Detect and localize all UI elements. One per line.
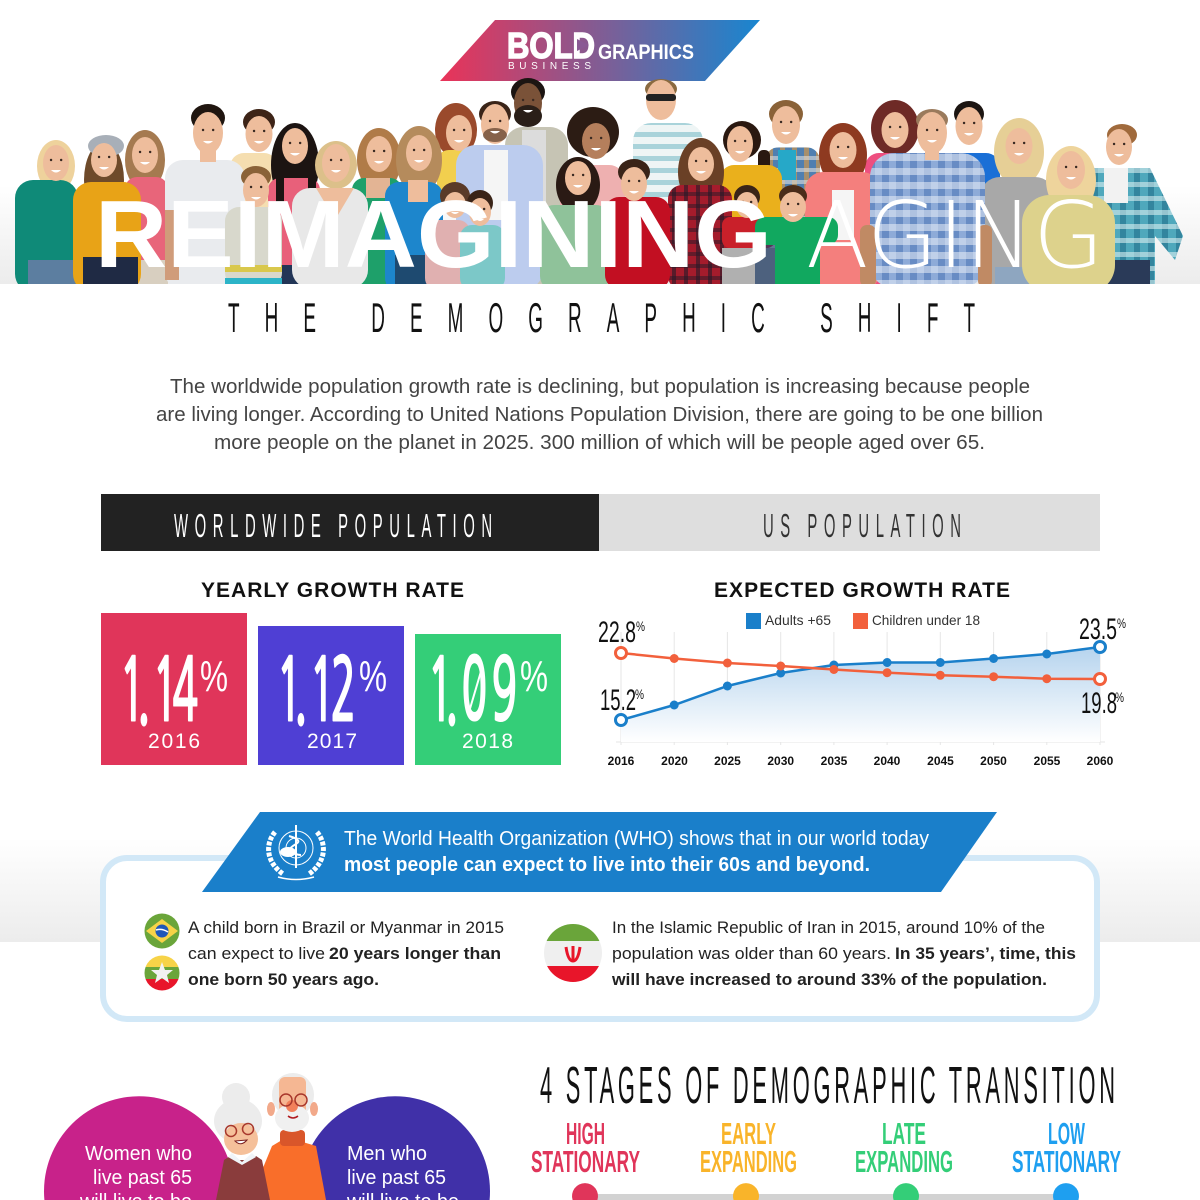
grandfather	[258, 1073, 326, 1200]
stat card 2017	[258, 626, 404, 765]
heading: expected growth rate: EXPECTED GROWTH RATE	[714, 579, 1010, 602]
WHO banner text: The World Health Organization (WHO) shows that in our world today	[344, 828, 929, 850]
x axis years: 2060	[1087, 754, 1114, 768]
value callouts: %	[635, 686, 644, 702]
area under adults series	[621, 647, 1100, 742]
chart legend: Children under 18	[872, 612, 980, 628]
tab: US population	[599, 494, 1100, 551]
heading: yearly growth rate: YEARLY GROWTH RATE	[201, 579, 464, 602]
stat card 2018: 2018	[462, 730, 513, 753]
value callouts	[598, 613, 1126, 720]
hero photo of diverse people	[0, 78, 1200, 293]
value callouts: %	[1117, 615, 1126, 631]
heading: 4 stages of demographic transition: 4 STAGES OF DEMOGRAPHIC TRANSITION	[540, 1057, 1115, 1115]
chart legend	[746, 612, 980, 629]
value callouts: %	[636, 618, 645, 634]
stat card 2016: %	[200, 652, 228, 701]
x axis years: 2035	[821, 754, 848, 768]
intro paragraph: are living longer. According to United Nations Population Division, there are going to be one billion	[156, 404, 1043, 426]
stage: low stationary	[1012, 1116, 1121, 1179]
x axis years: 2025	[714, 754, 741, 768]
x axis years: 2016	[608, 754, 635, 768]
stat card 2017: %	[359, 652, 387, 701]
stat card 2016	[101, 613, 247, 765]
intro paragraph	[156, 376, 1043, 454]
grandmother	[214, 1083, 270, 1200]
person group middle row	[125, 101, 1183, 292]
x axis years: 2055	[1034, 754, 1061, 768]
stage: high stationary	[531, 1116, 640, 1179]
person group front row	[15, 104, 1115, 293]
value callouts: 19.8	[1081, 687, 1117, 720]
stage: late expanding: LATE	[882, 1116, 926, 1151]
text: Iran: will have increased to around 33% of the population.	[611, 970, 1047, 989]
intro paragraph: more people on the planet in 2025. 300 million of which will be people aged over 65.	[214, 432, 985, 454]
icon: Iran flag	[544, 924, 602, 983]
text: Iran: population was older than 60 years.	[612, 944, 891, 963]
icon: elderly couple	[214, 1073, 326, 1200]
text: Brazil and Myanmar: 20 years longer than	[329, 944, 501, 963]
text: Iran: In the Islamic Republic of Iran in 2015, around 10% of the	[612, 918, 1045, 937]
tab: US population: US POPULATION	[763, 509, 961, 545]
title light word: AGING	[806, 182, 1104, 289]
stage: low stationary: LOW	[1048, 1116, 1085, 1151]
intro paragraph: The worldwide population growth rate is declining, but population is increasing because people	[170, 376, 1030, 398]
women life expectancy circle: live past 65	[93, 1167, 192, 1189]
value callouts: 22.8	[598, 616, 636, 649]
stage: high stationary: STATIONARY	[531, 1144, 640, 1179]
logo graphics label: GRAPHICS	[598, 41, 694, 64]
stage timeline	[572, 1183, 1079, 1200]
x axis years: 2040	[874, 754, 901, 768]
x axis years: 2020	[661, 754, 688, 768]
text: Iran	[611, 918, 1076, 989]
women life expectancy circle: Women who	[85, 1143, 192, 1165]
value callouts: 15.2	[600, 684, 636, 717]
chart legend: Adults +65	[765, 612, 831, 628]
men life expectancy circle: live past 65	[347, 1167, 446, 1189]
stat card 2017: 1.12	[276, 648, 357, 735]
series: adults +65	[616, 642, 1106, 726]
value callouts: %	[1115, 689, 1124, 705]
logo banner	[440, 20, 760, 81]
x axis years: 2030	[767, 754, 794, 768]
WHO info panel	[103, 812, 1097, 1019]
icon: WHO emblem	[269, 825, 323, 880]
x axis years: 2045	[927, 754, 954, 768]
text: Iran: In 35 years’, time, this	[895, 944, 1076, 963]
title bold word: REIMAGINING	[95, 181, 772, 288]
icon: Myanmar flag	[144, 955, 180, 991]
text: Brazil and Myanmar: A child born in Brazil or Myanmar in 2015	[188, 918, 504, 937]
tab: worldwide population: WORLDWIDE POPULATION	[174, 509, 492, 545]
stage: early expanding	[700, 1116, 797, 1179]
women life expectancy circle	[44, 1096, 234, 1200]
stat card 2016: 2016	[148, 730, 200, 753]
logo wordmark: BOLD	[507, 25, 595, 66]
WHO banner	[202, 812, 997, 892]
value callouts: 23.5	[1079, 613, 1117, 646]
men life expectancy circle: Men who	[347, 1143, 427, 1165]
pale background band	[0, 838, 1200, 942]
text: Brazil and Myanmar: can expect to live	[188, 944, 325, 963]
logo tagline: BUSINESS	[508, 61, 591, 72]
logo play mark	[577, 39, 589, 51]
text: Brazil and Myanmar	[188, 918, 504, 989]
icon: Brazil flag	[144, 913, 180, 949]
stat card 2018: %	[520, 652, 548, 701]
stage: late expanding: EXPANDING	[855, 1144, 953, 1179]
stage labels	[531, 1116, 1121, 1179]
x axis years: 2050	[980, 754, 1007, 768]
line chart: expected growth rate	[598, 612, 1126, 768]
x axis years	[608, 754, 1114, 768]
stage: early expanding: EARLY	[721, 1116, 776, 1151]
title	[95, 181, 1104, 289]
facial features	[51, 100, 1124, 221]
stage: early expanding: EXPANDING	[700, 1144, 797, 1179]
text: Brazil and Myanmar: one born 50 years ago.	[188, 970, 379, 989]
series: children under 18	[616, 648, 1106, 684]
stat card 2017: 2017	[307, 730, 357, 753]
person group back row	[230, 78, 1000, 288]
subtitle: THE DEMOGRAPHIC SHIFT	[228, 295, 975, 341]
stat card 2018: 1.09	[427, 648, 518, 735]
stage: late expanding	[855, 1116, 953, 1179]
tab: worldwide population	[101, 494, 599, 551]
stage: high stationary: HIGH	[566, 1116, 605, 1151]
stat card 2018	[415, 634, 561, 765]
stat card 2016: 1.14	[119, 648, 199, 735]
WHO banner: most people can expect to live into their 60s and beyond.	[344, 854, 870, 876]
men life expectancy circle	[300, 1096, 490, 1200]
